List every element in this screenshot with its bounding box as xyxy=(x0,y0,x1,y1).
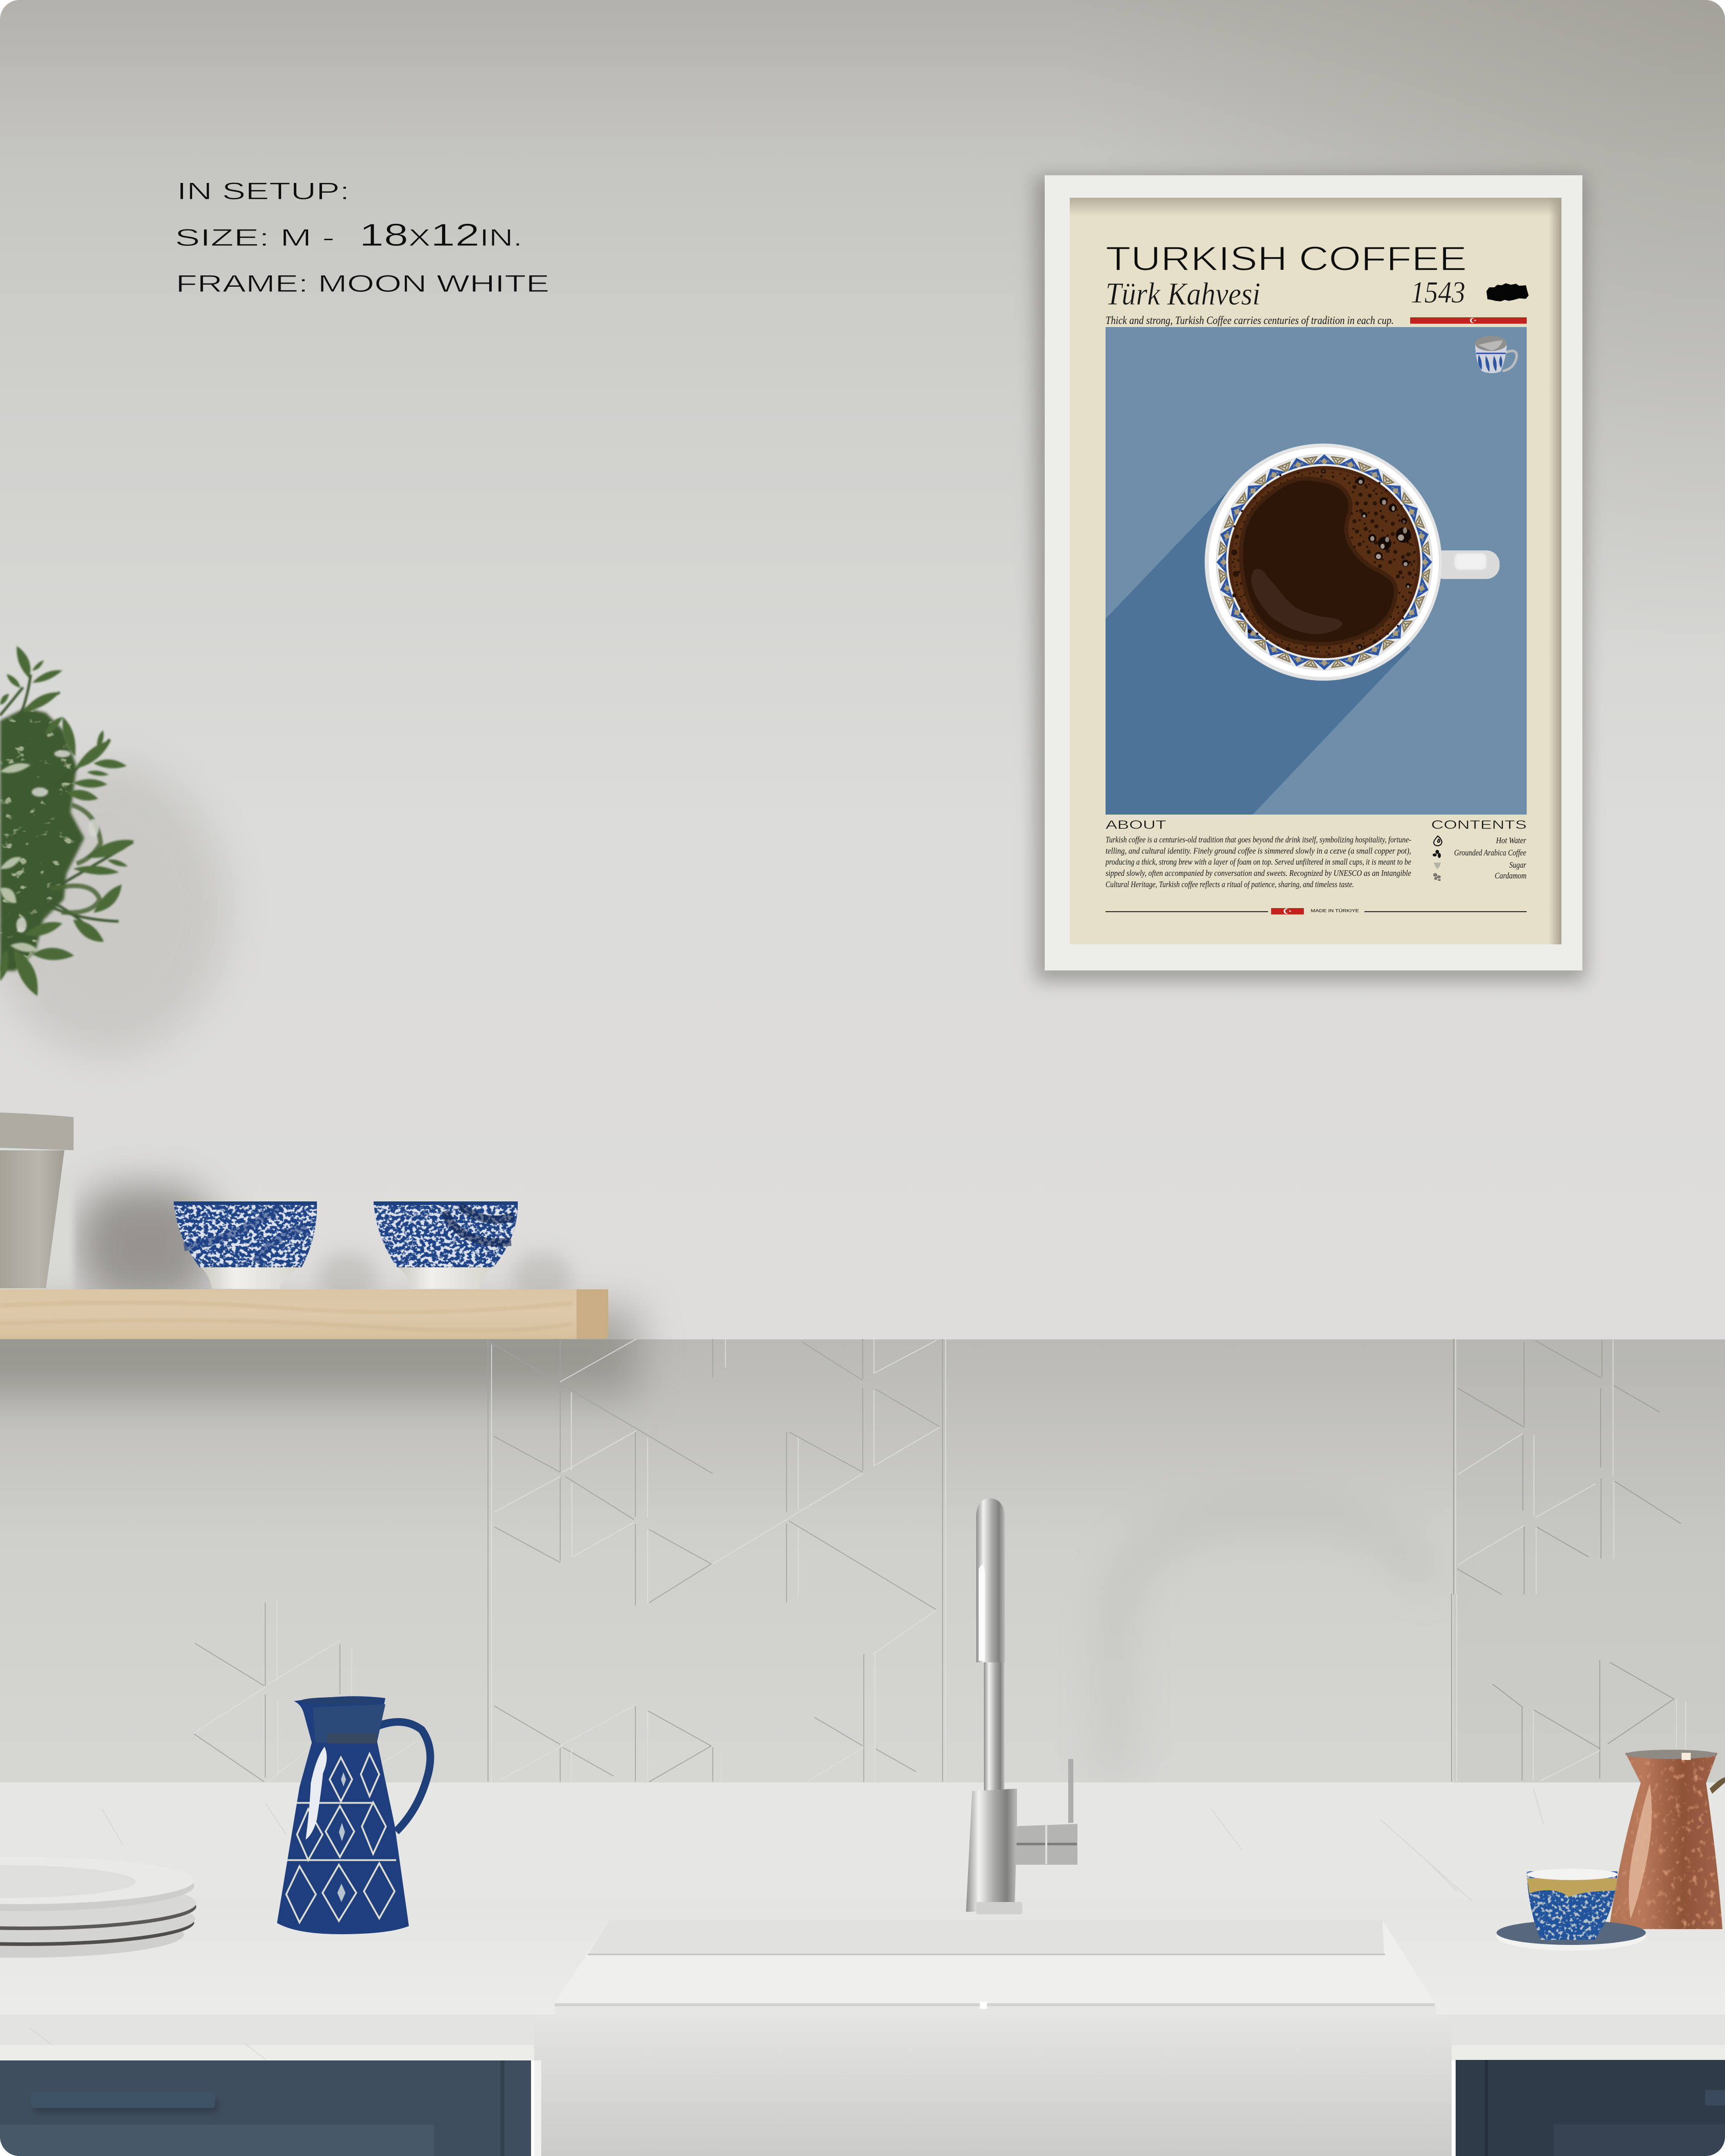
drawer handle xyxy=(31,2092,218,2113)
paper xyxy=(1070,198,1561,944)
foam bubbles xyxy=(1231,469,1416,654)
jug xyxy=(277,1696,430,1934)
about paragraph: telling, and cultural identity. Finely ground coffee is simmered slowly in a cezve (a small copper pot), xyxy=(1106,846,1411,855)
label: sugar: Sugar xyxy=(1509,860,1526,870)
cabinet right xyxy=(1456,2060,1725,2156)
contents heading: CONTENTS xyxy=(1431,818,1527,832)
cup long shadow xyxy=(1106,492,1411,815)
about paragraph: Turkish coffee is a centuries-old tradition that goes beyond the drink itself, symbolizing hospitality, fortune- xyxy=(1106,835,1411,844)
jug handle xyxy=(377,1722,430,1832)
wall background xyxy=(0,0,1725,1341)
setup text block: SIZE: M - xyxy=(175,224,335,251)
pot and shelf shadow on wall xyxy=(49,1175,572,1303)
faucet xyxy=(966,1498,1077,1914)
coffee highlight xyxy=(1251,569,1343,634)
jug highlight xyxy=(306,1747,327,1840)
small blue cup and saucer xyxy=(1497,1869,1646,1951)
cup xyxy=(1527,1871,1618,1940)
icon: hot water xyxy=(1434,836,1442,846)
blue bowl right xyxy=(374,1201,518,1289)
plant shadow on wall xyxy=(0,761,230,1058)
flag bar xyxy=(1410,317,1527,324)
made in label: MADE IN TÜRKIYE xyxy=(1310,908,1359,913)
contents list xyxy=(1433,836,1526,881)
paper inner shadow xyxy=(1070,198,1561,944)
white frame xyxy=(1045,175,1582,970)
faucet neck xyxy=(976,1498,1005,1662)
about paragraph: Cultural Heritage, Turkish coffee reflects a ritual of patience, sharing, and timeless taste. xyxy=(1106,879,1354,889)
about paragraph: sipped slowly, often accompanied by conversation and sweets. Recognized by UNESCO as an Intangible xyxy=(1106,868,1411,878)
saucer xyxy=(1497,1920,1646,1951)
setup text block: FRAME: MOON WHITE xyxy=(176,270,549,297)
label: coffee: Grounded Arabica Coffee xyxy=(1454,848,1526,857)
plates xyxy=(0,1857,196,1958)
title: TURKISH COFFEE xyxy=(1106,240,1467,278)
about paragraph: producing a thick, strong brew with a layer of foam on top. Served unfiltered in small cups, it is meant to be xyxy=(1105,857,1411,867)
tagline: Thick and strong, Turkish Coffee carries centuries of tradition in each cup. xyxy=(1106,314,1394,327)
icon: cardamom xyxy=(1433,873,1441,881)
jug neck xyxy=(313,1704,385,1744)
jug body xyxy=(277,1696,409,1934)
copper pot xyxy=(1609,1750,1725,1929)
backsplash xyxy=(0,1308,1725,1784)
setup text block: 18 X12 IN. xyxy=(359,218,522,253)
framed poster xyxy=(1036,175,1585,981)
icon: coffee beans xyxy=(1433,850,1441,858)
faucet base xyxy=(966,1789,1017,1912)
cabinet left xyxy=(0,2060,531,2156)
icon: small patterned cup xyxy=(1475,336,1516,373)
setup text block: IN SETUP: xyxy=(177,177,350,204)
faucet lever and body xyxy=(1068,1759,1073,1823)
tile grooves xyxy=(194,1339,1686,1782)
sink xyxy=(534,1920,1452,2156)
shelf shadow on backsplash xyxy=(0,1308,639,1395)
footer xyxy=(1106,908,1527,915)
blue artwork panel xyxy=(1106,327,1527,815)
about paragraph xyxy=(1105,835,1411,889)
setup text block xyxy=(175,177,549,297)
subtitle: Türk Kahvesi xyxy=(1106,277,1260,312)
frame shadow xyxy=(1036,176,1585,981)
coffee foam xyxy=(1228,466,1420,658)
icon: sugar xyxy=(1434,863,1441,869)
ornamental band xyxy=(1216,454,1432,670)
dark coffee centre xyxy=(1241,478,1396,644)
label: cardamom: Cardamom xyxy=(1494,871,1526,880)
cup rim xyxy=(1205,444,1442,681)
plant xyxy=(0,646,134,996)
about heading: ABOUT xyxy=(1106,818,1166,832)
icon: Turkey silhouette xyxy=(1487,284,1528,301)
jug decoration xyxy=(286,1754,396,1922)
footer flag xyxy=(1271,908,1304,915)
blue bowl left xyxy=(174,1201,317,1289)
shelf xyxy=(0,1289,608,1339)
marble upstand and counter xyxy=(0,1782,1725,2060)
illustration: coffee cup from above xyxy=(1205,444,1500,681)
year: 1543 xyxy=(1411,275,1465,309)
label: hot water: Hot Water xyxy=(1496,836,1526,845)
grey pot xyxy=(0,1112,74,1288)
cup handle xyxy=(1431,550,1500,579)
